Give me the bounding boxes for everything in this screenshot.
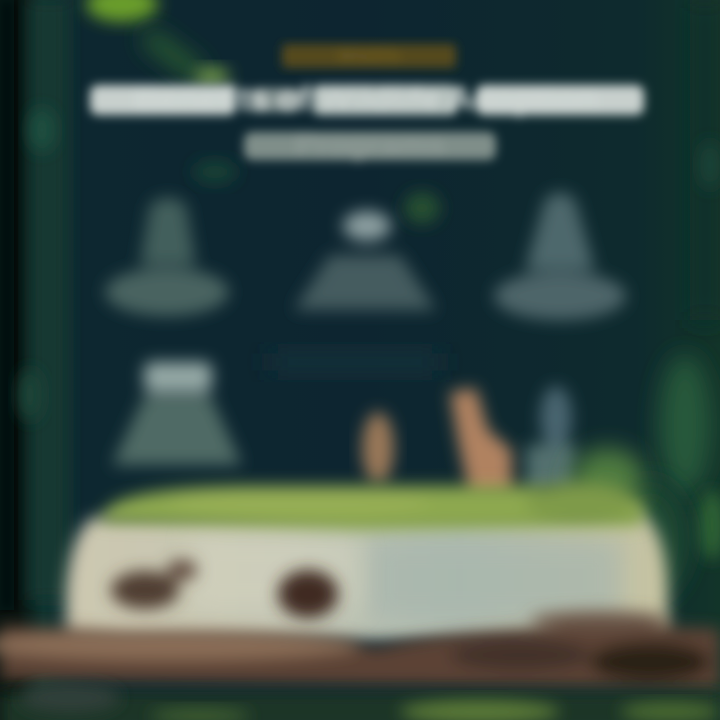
title: Programs — [295, 126, 445, 162]
platform: moss top — [100, 482, 645, 530]
icon: benefit 2 — [343, 211, 391, 241]
icon: benefit 4 — [144, 362, 212, 392]
text: benefit 6 — [526, 445, 576, 493]
icon: benefit 1 — [140, 198, 196, 265]
animal ears: left — [362, 412, 394, 484]
benefit item 6 — [526, 386, 576, 493]
foliage: bush beside the platform — [572, 448, 644, 508]
text: benefit 1 — [105, 268, 229, 316]
benefit item 3 — [494, 192, 626, 320]
benefit item 5 faint text — [270, 352, 440, 372]
text: benefit 3 — [494, 272, 626, 320]
benefit item 2 — [294, 211, 436, 310]
title — [90, 80, 644, 162]
foliage: top-left leaves — [86, 0, 440, 224]
eyebrow label: Wildlife — [337, 46, 401, 66]
log foreground — [0, 611, 720, 690]
animal: left silhouette — [111, 560, 197, 609]
text: benefit 4 — [112, 395, 242, 465]
animal ears: right — [450, 388, 512, 498]
title: Benefits of Wildlife Adoption — [134, 80, 598, 118]
benefit item 1 — [105, 198, 229, 316]
text: benefit 2 — [294, 255, 436, 310]
platform: cream block — [66, 512, 668, 640]
foreground grass — [0, 684, 720, 720]
icon: benefit 3 — [525, 192, 595, 270]
eyebrow label — [282, 44, 456, 68]
animal: middle silhouette — [278, 570, 338, 618]
benefit item 4 — [112, 362, 242, 465]
icon: benefit 6 — [540, 386, 572, 450]
